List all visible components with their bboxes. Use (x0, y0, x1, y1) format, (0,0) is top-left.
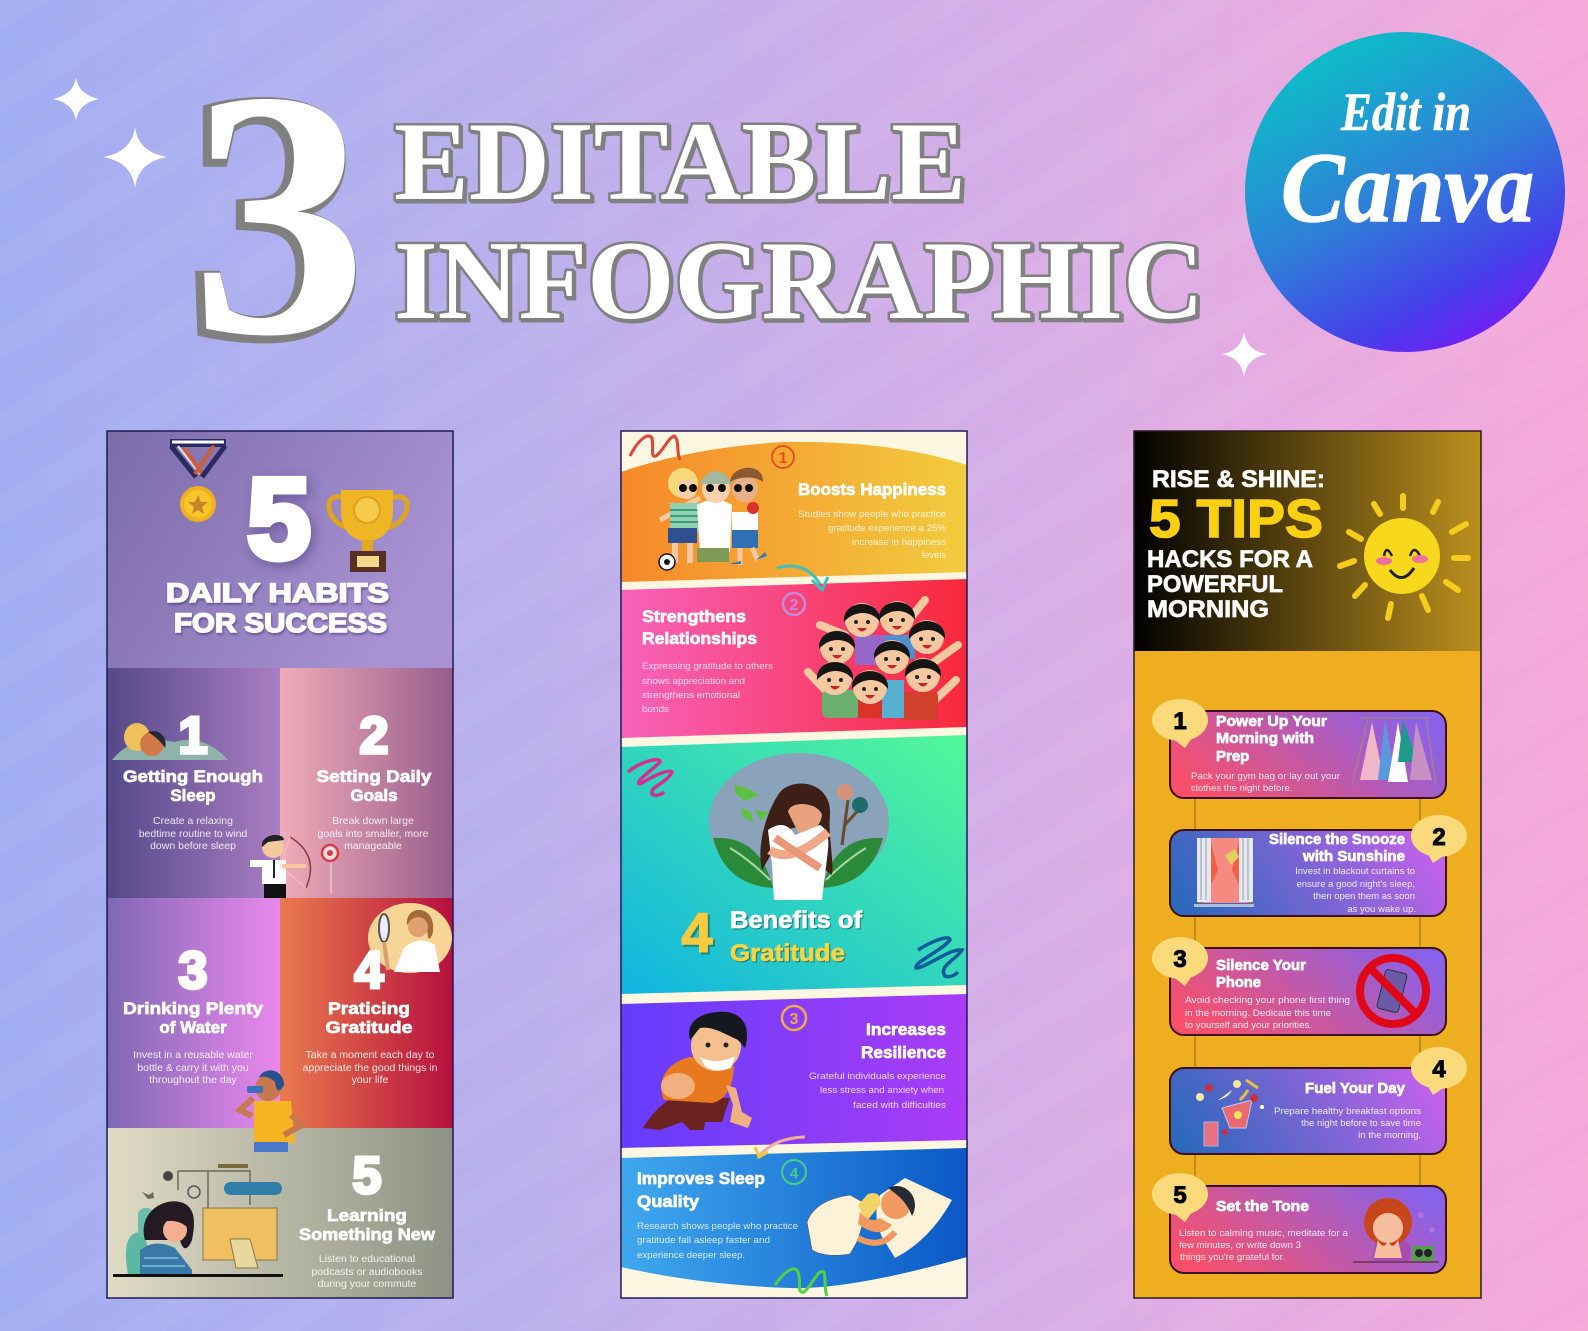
card: setting daily goals: manageable (344, 840, 402, 852)
band: benefits of gratitude hero: Benefits of (730, 907, 863, 934)
icon: number 2 (783, 593, 805, 615)
card: getting enough sleep: down before sleep (150, 840, 236, 852)
card: fuel your day: Prepare healthy breakfast options (1274, 1106, 1421, 1117)
band: increases resilience: Grateful individuals experience (809, 1071, 946, 1082)
card: practicing gratitude: Praticing (328, 999, 410, 1018)
band: increases resilience: Resilience (861, 1043, 946, 1062)
card: set the tone: things you're grateful for. (1180, 1252, 1285, 1263)
card: silence the snooze: then open them as soon (1313, 891, 1415, 902)
card: getting enough sleep: bedtime routine to wind (139, 828, 247, 840)
illustration: archer (250, 835, 310, 898)
card: set the tone (1170, 1186, 1446, 1273)
bubble: number 1: 1 (1173, 708, 1187, 735)
icon: woman hugging herself (709, 753, 889, 900)
card: getting enough sleep: Create a relaxing (153, 815, 233, 827)
icon: number 4 (782, 1160, 806, 1184)
icon: healthy food (1196, 1080, 1264, 1146)
connector lines (1195, 798, 1420, 1186)
card: setting daily goals: Break down large (332, 815, 414, 827)
band: improves sleep quality: Quality (637, 1192, 700, 1211)
card: power up your morning: Power Up Your (1216, 713, 1327, 730)
card: fuel your day: Fuel Your Day (1305, 1080, 1406, 1097)
scribble: pink (628, 760, 672, 795)
header: rise and shine: HACKS FOR A (1147, 546, 1313, 573)
band: strengthens relationships (621, 579, 967, 738)
card: silence your phone: in the morning. Dedicate this time (1185, 1008, 1331, 1019)
card: silence the snooze: with Sunshine (1302, 848, 1405, 865)
arrow: yellow (755, 1137, 805, 1157)
band: improves sleep quality: experience deeper sleep. (637, 1250, 745, 1261)
icon: window with curtains (1194, 838, 1254, 907)
icon: woman with mirror (368, 903, 452, 973)
band: benefits of gratitude hero: Gratitude (730, 940, 845, 967)
title: EDITABLE INFOGRAPHIC: EDITABLE (396, 102, 968, 226)
icon: determined boy (643, 1012, 752, 1130)
card: set the tone: Listen to calming music, meditate for a (1179, 1228, 1349, 1239)
card: drinking plenty of water: Invest in a reusable water (133, 1049, 253, 1061)
card: setting daily goals: 2 (360, 707, 388, 765)
panel: daily habits (107, 431, 453, 1298)
bubble: number 5 (1152, 1173, 1208, 1222)
band: improves sleep quality: Improves Sleep (637, 1169, 765, 1188)
icon: number 1: 1 (779, 450, 788, 467)
card: learning something new (107, 1128, 453, 1298)
header: daily habits (107, 431, 453, 668)
title: big number 3: 3 (187, 22, 363, 412)
band: strengthens relationships: bonds (642, 704, 669, 715)
band: boosts happiness: levels (922, 550, 946, 561)
band: benefits of gratitude hero: 4 (681, 901, 713, 964)
title: EDITABLE INFOGRAPHIC: INFOGRAPHIC (394, 219, 1204, 343)
card: drinking plenty of water: of Water (159, 1018, 227, 1037)
icon: sleeping person (112, 723, 228, 760)
icon: number 3 (782, 1006, 806, 1030)
band: strengthens relationships: Strengthens (642, 607, 746, 626)
heading: daily habits for success: DAILY HABITS (166, 578, 389, 608)
band: improves sleep quality: gratitude fall asleep faster and (637, 1235, 770, 1246)
icon: no phone sign (1360, 958, 1426, 1024)
panel border (621, 431, 967, 1298)
band: boosts happiness (621, 442, 967, 582)
icon: girl at computer (113, 1164, 283, 1277)
card: getting enough sleep (107, 668, 280, 898)
bubble: number 1 (1152, 699, 1208, 748)
icon: target (322, 845, 338, 893)
card: set the tone: Set the Tone (1216, 1198, 1309, 1215)
icon: sleeping person (807, 1178, 952, 1258)
band: increases resilience: Increases (866, 1020, 946, 1039)
card: silence your phone: Phone (1216, 974, 1261, 991)
card: learning something new: Learning (327, 1206, 407, 1225)
band: boosts happiness: increase in happiness (852, 537, 946, 548)
band: boosts happiness: Boosts Happiness (798, 480, 946, 499)
card: power up your morning: clothes the night before. (1191, 783, 1292, 794)
bubble: number 4 (1411, 1047, 1467, 1095)
header: rise and shine (1134, 431, 1481, 651)
bubble: number 3: 3 (1173, 946, 1187, 973)
heading: daily habits for success: FOR SUCCESS (174, 608, 387, 638)
card: silence the snooze: ensure a good night's sleep, (1296, 879, 1415, 890)
card: setting daily goals: Setting Daily (316, 767, 432, 786)
icon: trophy (329, 490, 407, 572)
card: silence the snooze: as you wake up. (1347, 904, 1416, 915)
icon: kids group (659, 468, 767, 570)
icon: smiling sun (1340, 496, 1468, 618)
card: practicing gratitude: appreciate the good things in (303, 1062, 438, 1074)
panel: morning tips (1134, 431, 1481, 1298)
icon: happy children (808, 600, 958, 720)
card: fuel your day (1170, 1068, 1446, 1154)
panel: benefits of gratitude (621, 431, 967, 1298)
title: EDITABLE INFOGRAPHIC: EDITABLE (394, 100, 966, 224)
bubble: number 2: 2 (1432, 824, 1446, 851)
band: increases resilience: faced with difficulties (853, 1100, 946, 1111)
card: setting daily goals (280, 668, 453, 898)
card: power up your morning: Morning with (1216, 730, 1314, 747)
title: EDITABLE INFOGRAPHIC (394, 100, 1206, 345)
card: silence your phone: Silence Your (1216, 957, 1306, 974)
card: practicing gratitude (280, 898, 453, 1128)
card: practicing gratitude: 4 (355, 942, 384, 1000)
card: drinking plenty of water: throughout the day (149, 1074, 238, 1086)
card: learning something new: Listen to educational (319, 1253, 415, 1265)
card: silence the snooze: Invest in blackout curtains to (1295, 866, 1415, 877)
band: strengthens relationships: shows appreciation and (642, 676, 745, 687)
bubble: number 2 (1411, 815, 1467, 863)
card: power up your morning: Prep (1216, 748, 1249, 765)
card: drinking plenty of water (107, 898, 280, 1128)
illustration: man drinking water (240, 1070, 302, 1152)
arrow: teal (777, 566, 828, 590)
badge: Edit in Canva: Edit in (1340, 82, 1471, 142)
band: boosts happiness: Studies show people who practice (798, 509, 946, 520)
heading: daily habits for success (166, 578, 389, 638)
number 5: 5 (247, 456, 311, 583)
card: practicing gratitude: your life (352, 1074, 389, 1086)
bubble: number 4: 4 (1432, 1056, 1446, 1083)
band: strengthens relationships: Expressing gratitude to others (642, 661, 773, 672)
band: improves sleep quality (621, 1148, 967, 1288)
card: practicing gratitude: Gratitude (326, 1018, 412, 1037)
header: rise and shine: MORNING (1147, 596, 1269, 623)
bubble: number 3 (1152, 937, 1208, 986)
title: EDITABLE INFOGRAPHIC: INFOGRAPHIC (396, 221, 1206, 345)
header: rise and shine: 5 TIPS (1149, 489, 1323, 549)
icon: number 1 (772, 446, 794, 468)
card: fuel your day: the night before to save time (1301, 1118, 1421, 1129)
card: fuel your day: in the morning. (1358, 1130, 1421, 1141)
card: learning something new: podcasts or audiobooks (312, 1266, 422, 1278)
scribble: red (630, 436, 680, 460)
scribble: blue (916, 938, 962, 977)
icon: number 2: 2 (790, 597, 799, 614)
card: drinking plenty of water: 3 (179, 942, 207, 1000)
card: learning something new: 5 (353, 1147, 381, 1205)
icon: girl with radio (1353, 1198, 1439, 1263)
icon: number 3: 3 (790, 1011, 799, 1028)
card: getting enough sleep: 1 (179, 707, 207, 765)
band: strengthens relationships: strengthens emotional (642, 690, 740, 701)
icon: medal (170, 442, 226, 522)
card: drinking plenty of water: Drinking Plenty (123, 999, 264, 1018)
card: silence your phone: to yourself and your priorities. (1185, 1020, 1312, 1031)
icon: sparkles (53, 78, 1267, 376)
header: rise and shine: POWERFUL (1147, 571, 1283, 598)
card: getting enough sleep: Getting Enough (123, 767, 263, 786)
band: strengthens relationships: Relationships (642, 629, 757, 648)
band: boosts happiness: gratitude experience a 25% (828, 523, 947, 534)
badge: Edit in Canva: Canva (1281, 132, 1534, 243)
card: power up your morning: Pack your gym bag or lay out your (1191, 771, 1340, 782)
icon: clothes rack (1352, 718, 1436, 785)
card: power up your morning (1170, 711, 1446, 798)
icon: number 4: 4 (790, 1165, 799, 1182)
card: practicing gratitude: Take a moment each day to (306, 1049, 435, 1061)
card: getting enough sleep: Sleep (170, 786, 216, 805)
card: learning something new: during your commute (318, 1278, 416, 1290)
band: benefits of gratitude hero (621, 735, 967, 994)
card: silence your phone (1170, 948, 1446, 1035)
badge: Edit in Canva (1245, 32, 1565, 352)
band: increases resilience: less stress and anxiety when (820, 1085, 944, 1096)
title: big number 3: 3 (191, 19, 367, 409)
card: drinking plenty of water: bottle & carry it with you (137, 1062, 249, 1074)
band: increases resilience (621, 994, 967, 1148)
card: silence the snooze (1170, 830, 1446, 916)
band: improves sleep quality: Research shows people who practice (637, 1221, 798, 1232)
card: set the tone: few minutes, or write down 3 (1179, 1240, 1301, 1251)
bubble: number 5: 5 (1173, 1182, 1187, 1209)
panel border (1134, 431, 1481, 1298)
card: silence your phone: Avoid checking your phone first thing (1185, 995, 1350, 1006)
panel border (107, 431, 453, 1298)
header: rise and shine: RISE & SHINE: (1152, 466, 1325, 493)
card: setting daily goals: goals into smaller, more (318, 828, 429, 840)
card: learning something new: Something New (299, 1225, 436, 1244)
card: silence the snooze: Silence the Snooze (1269, 831, 1405, 848)
scribble: green (775, 1269, 827, 1296)
card: setting daily goals: Goals (350, 786, 398, 805)
